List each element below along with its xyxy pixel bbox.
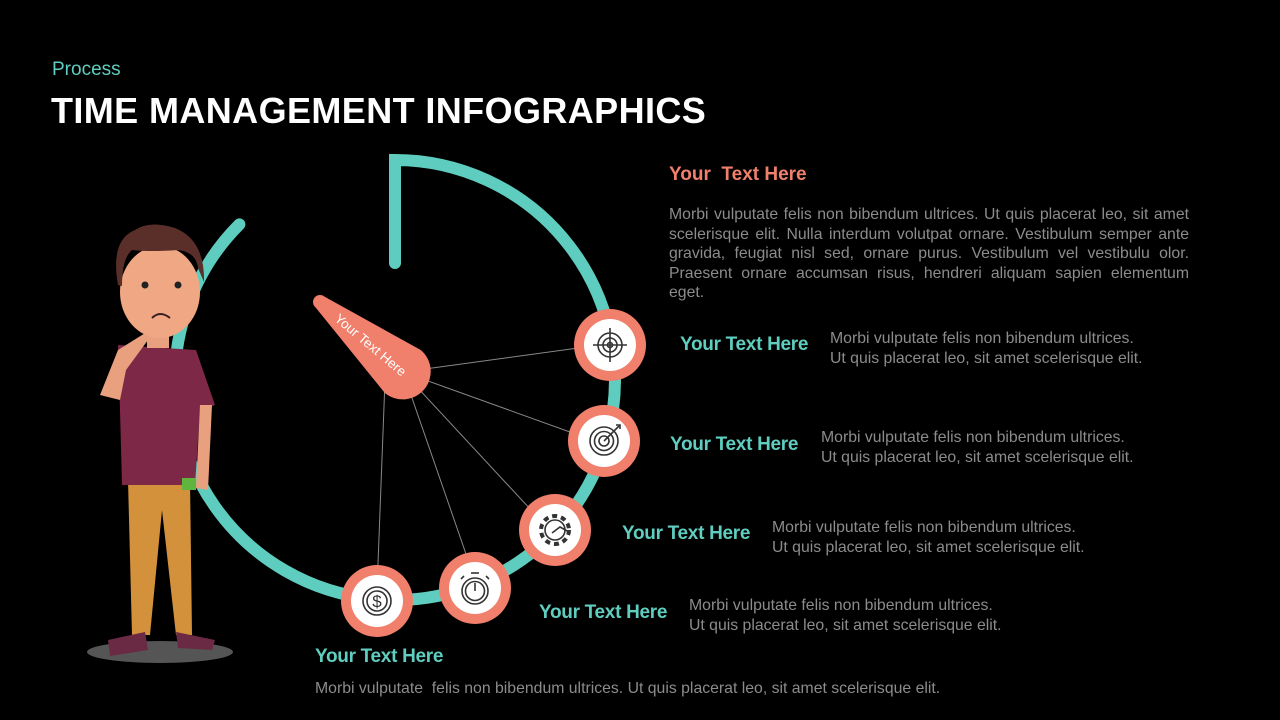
- item 1: Ut quis placerat leo, sit amet scelerisque elit.: [830, 350, 1143, 366]
- item 2: Ut quis placerat leo, sit amet scelerisque elit.: [821, 448, 1134, 466]
- item 3: [622, 519, 1085, 556]
- pointer: [297, 276, 442, 411]
- subtitle: Process: [52, 59, 121, 80]
- icon: gear: [519, 494, 591, 566]
- icon: crosshair: [574, 309, 646, 381]
- item 4: Your Text Here: [539, 602, 667, 623]
- item 5: Your Text Here: [315, 646, 443, 667]
- icon: stopwatch: [439, 552, 511, 624]
- character: [87, 224, 233, 663]
- item 5: Morbi vulputate felis non bibendum ultrices. Ut quis placerat leo, sit amet scelerisque elit.: [315, 680, 940, 697]
- item 2: Your Text Here: [670, 434, 798, 455]
- item 1: Morbi vulputate felis non bibendum ultrices.: [830, 330, 1134, 347]
- item 3: Your Text Here: [622, 523, 750, 544]
- icon: dollar: [341, 565, 413, 637]
- item 4: Ut quis placerat leo, sit amet scelerisque elit.: [689, 616, 1002, 634]
- block: top paragraph: Morbi vulputate felis non bibendum ultrices. Ut quis placerat leo, sit amet scelerisque elit. Nulla interdum volutpat ornare. Vestibulum semper ante gravida, feugiat nisl sed, ornare purus. Vestibulum vel vestibulu olor. Praesent ornare accumsan risus, hendreri aliquam sapien elementum eget.: [669, 206, 1189, 301]
- item 1: [680, 330, 1143, 366]
- item 3: Ut quis placerat leo, sit amet scelerisque elit.: [772, 538, 1085, 556]
- pointer: Your Text Here: [332, 311, 409, 379]
- item 2: [670, 429, 1134, 466]
- item 2: Morbi vulputate felis non bibendum ultrices.: [821, 429, 1125, 446]
- icon: dollar: $: [372, 592, 382, 611]
- item 3: Morbi vulputate felis non bibendum ultrices.: [772, 519, 1076, 536]
- item 1: Your Text Here: [680, 334, 808, 355]
- block: top heading: Your Text Here: [669, 164, 807, 185]
- item 5: [315, 646, 940, 697]
- icon: target: [568, 405, 640, 477]
- item 4: [539, 597, 1002, 634]
- connector lines: [377, 345, 600, 590]
- arc: [175, 160, 615, 600]
- item 4: Morbi vulputate felis non bibendum ultrices.: [689, 597, 993, 614]
- title: TIME MANAGEMENT INFOGRAPHICS: [51, 90, 706, 131]
